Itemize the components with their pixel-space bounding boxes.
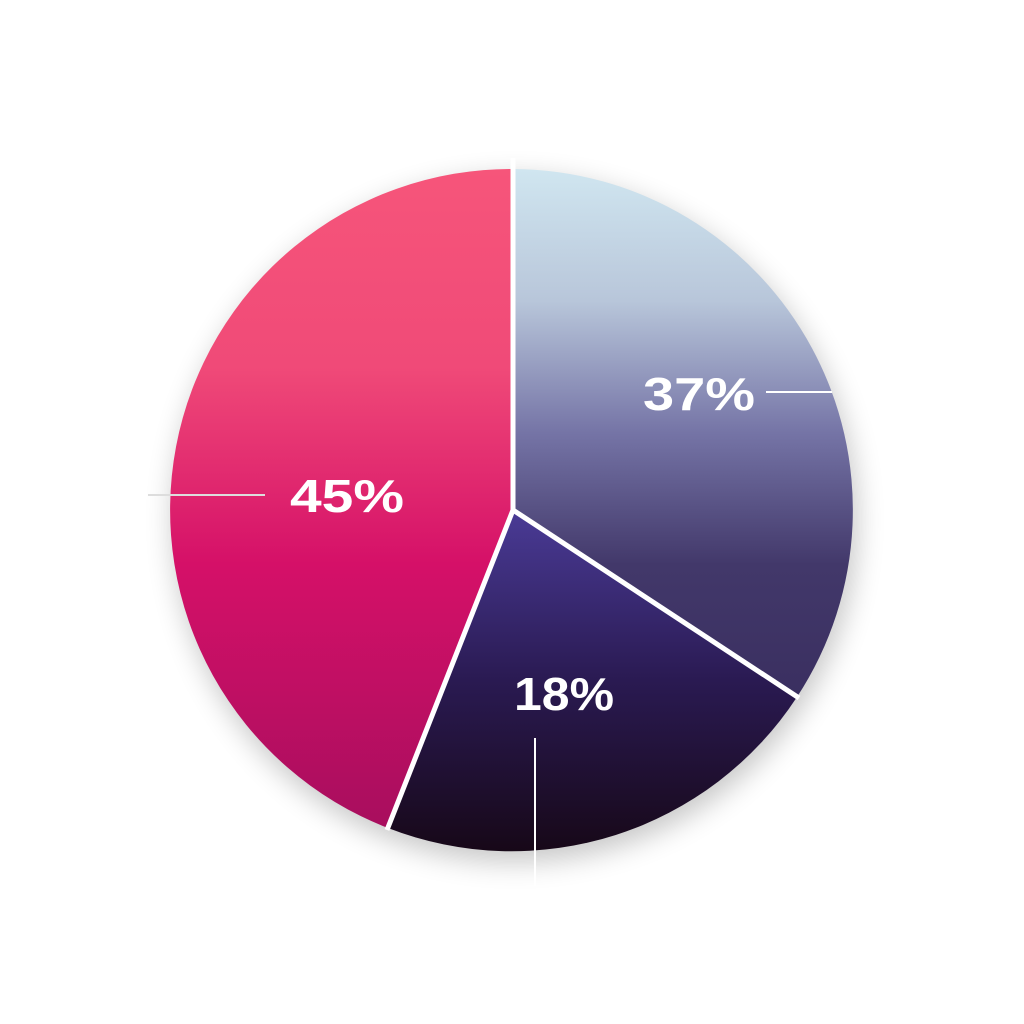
slice: 37% bbox=[513, 169, 853, 697]
label: 45%: 45% bbox=[290, 470, 404, 522]
label: 37%: 37% bbox=[643, 368, 755, 420]
slice: 45% bbox=[170, 169, 513, 828]
slice: 18% bbox=[388, 510, 797, 851]
label: 18%: 18% bbox=[514, 668, 614, 720]
shadow bbox=[173, 178, 857, 862]
separators bbox=[387, 158, 799, 830]
leader lines bbox=[148, 392, 832, 886]
